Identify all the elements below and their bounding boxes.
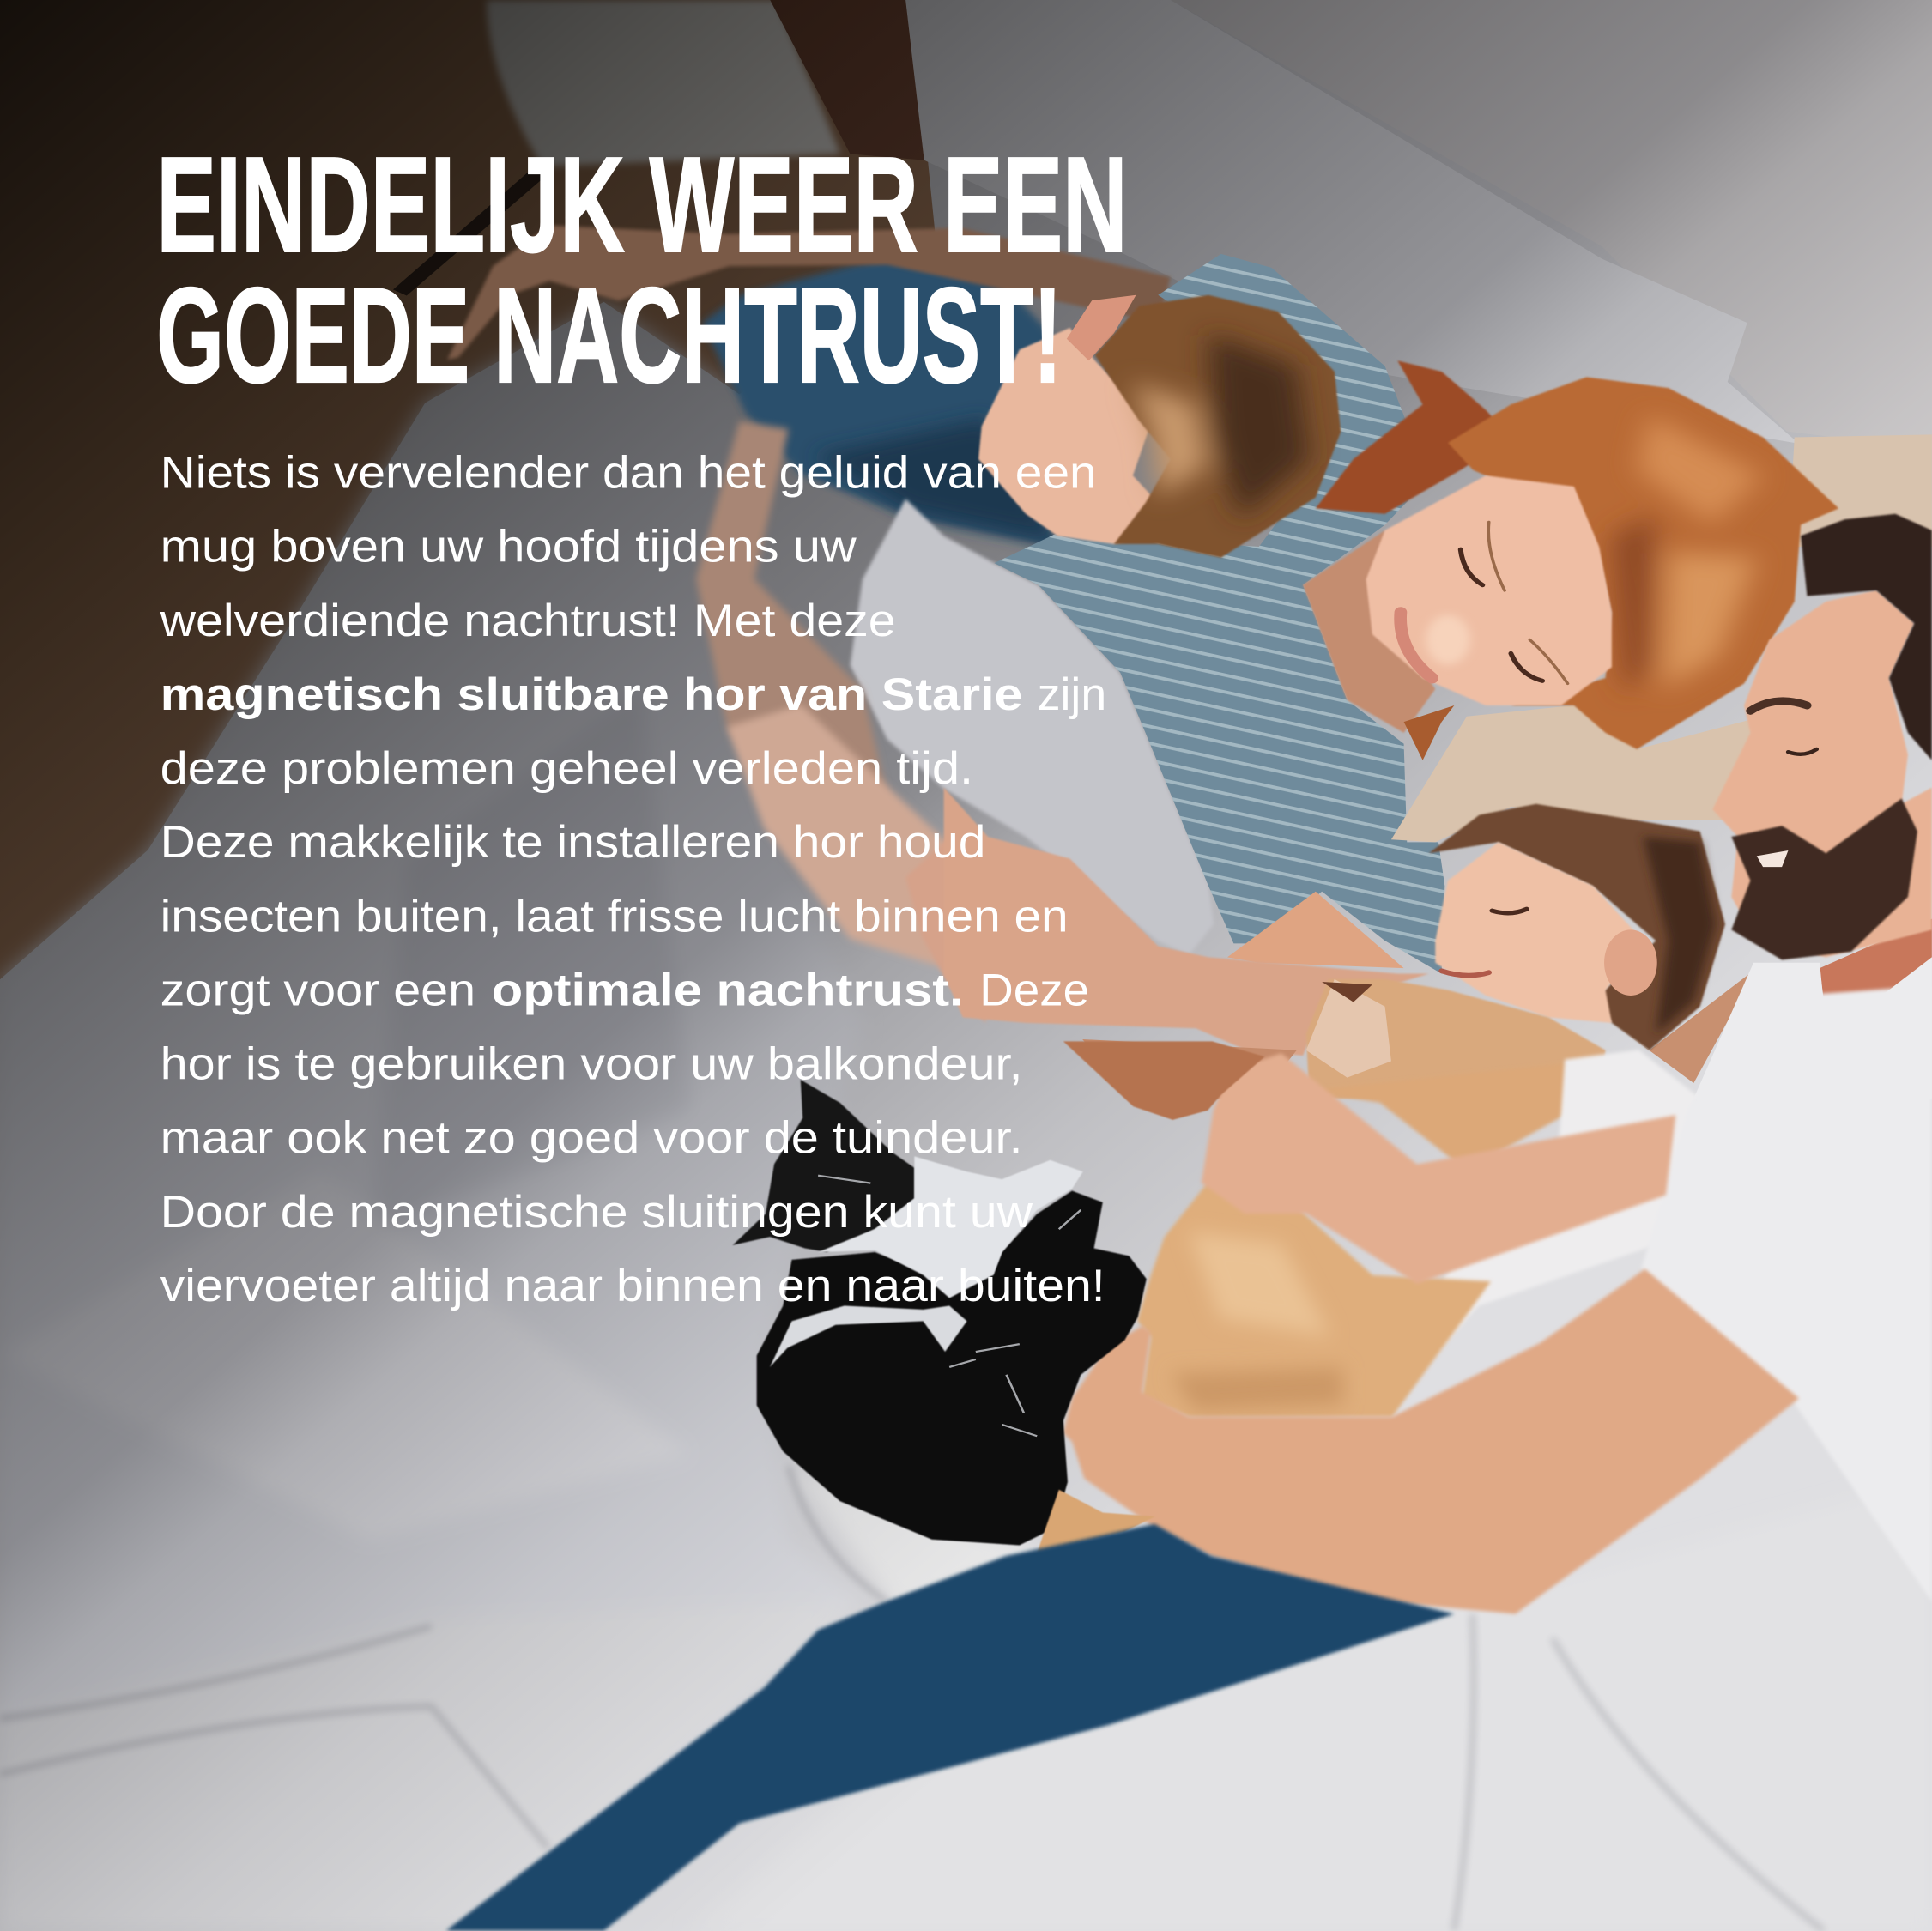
- wooden floor: [0, 0, 936, 979]
- teddy nose: [1322, 982, 1372, 1002]
- title: [156, 130, 1128, 411]
- girl's arm: [1202, 1053, 1675, 1284]
- boy's face: [978, 328, 1184, 544]
- girl's ear and features: [1442, 909, 1657, 996]
- mother's forearm: [1227, 892, 1404, 968]
- body text: viervoeter altijd naar binnen en naar buiten!: [160, 1261, 1105, 1311]
- cat fur highlights: [818, 1176, 1081, 1436]
- body text: magnetisch sluitbare hor van Starie: [160, 669, 1023, 720]
- body text: deze problemen geheel verleden tijd.: [160, 743, 973, 794]
- jeans leg: [446, 1524, 1454, 1931]
- body text: insecten buiten, laat frisse lucht binnen en: [160, 891, 1069, 941]
- girl's shoulder: [1612, 968, 1757, 1083]
- boy's ear: [1067, 295, 1136, 360]
- girl's t-shirt: [1380, 1050, 1698, 1417]
- teddy snout: [1306, 979, 1391, 1078]
- headboard brick: [770, 0, 924, 160]
- father's smile: [1757, 850, 1788, 867]
- father's neck: [1820, 919, 1932, 1028]
- body text: Door de magnetische sluitingen kunt uw: [160, 1187, 1033, 1238]
- teddy fur shading: [1171, 1232, 1343, 1411]
- blanket crease lines: [0, 1466, 1824, 1931]
- father's shirt collar: [1693, 957, 1932, 1099]
- mother's striped dress: [994, 443, 1448, 973]
- body text: Niets is vervelender dan het geluid van een: [160, 447, 1097, 498]
- boy's forearm: [696, 421, 905, 875]
- body text: zijn: [1038, 669, 1106, 720]
- title: EINDELIJK WEER EEN: [156, 130, 1128, 281]
- father's fingers: [905, 838, 998, 1023]
- girl's hair shade: [1644, 837, 1716, 1034]
- upper pillow: [905, 0, 1799, 444]
- boy's hand and arm: [447, 226, 1171, 360]
- boy's hair: [1095, 295, 1341, 558]
- lamp: [487, 0, 840, 166]
- hair highlights: [1612, 415, 1763, 694]
- body text: maar ook net zo goed voor de tuindeur.: [160, 1113, 1023, 1164]
- mother's neck: [1303, 530, 1435, 733]
- title: GOEDE NACHTRUST!: [156, 260, 1062, 411]
- body text: [160, 447, 1106, 1311]
- mother's forearm lower: [1063, 1041, 1265, 1120]
- cat white chest: [818, 1156, 1083, 1298]
- girl's hair: [1429, 804, 1725, 1050]
- body text: hor is te gebruiken voor uw balkondeur,: [160, 1039, 1023, 1090]
- mother's hair: [1448, 377, 1838, 749]
- teddy leg: [1037, 1490, 1155, 1553]
- body text: mug boven uw hoofd tijdens uw: [160, 522, 857, 572]
- father's eye and brow: [1750, 701, 1816, 754]
- lower forearm: [1082, 1039, 1297, 1099]
- body text: welverdiende nachtrust! Met deze: [160, 596, 896, 646]
- cat body: [757, 1191, 1147, 1546]
- mother's face: [1366, 475, 1612, 705]
- father's hair: [1801, 514, 1932, 760]
- boy's shirt: [702, 252, 1084, 548]
- boy's striped collar: [1158, 254, 1416, 508]
- mother's hand: [727, 705, 955, 967]
- teddy body: [1137, 1183, 1491, 1417]
- body text: Deze: [979, 965, 1089, 1015]
- mother's back hair: [1316, 360, 1511, 514]
- body text: zorgt voor een: [160, 965, 475, 1015]
- boy's shirt shade: [813, 419, 1060, 542]
- body text: optimale nachtrust.: [492, 965, 964, 1015]
- cat white stripe: [770, 1305, 967, 1367]
- father's t-shirt body: [1641, 985, 1932, 1601]
- father's face: [1712, 590, 1932, 957]
- cat head: [733, 1080, 914, 1252]
- father's hand: [944, 788, 1429, 1056]
- central figures: [944, 254, 1932, 1099]
- white pillow under boy: [851, 499, 1214, 955]
- wall: [1171, 0, 1932, 450]
- mother's eyes, nose and lips: [1401, 522, 1567, 683]
- father's beard: [1731, 798, 1917, 960]
- floor plank line: [393, 166, 547, 296]
- boy's hair shading: [1133, 333, 1309, 519]
- beige head pillow: [1391, 705, 1763, 842]
- father's arm: [1063, 1269, 1799, 1614]
- teddy head: [1306, 979, 1606, 1099]
- beige side pillow: [1788, 434, 1932, 547]
- body text: Deze makkelijk te installeren hor houd: [160, 817, 985, 868]
- lower hair curl: [1404, 705, 1454, 760]
- teddy head lower: [1306, 1060, 1602, 1171]
- lower group: [733, 1041, 1265, 1553]
- girl's face: [1435, 842, 1644, 1023]
